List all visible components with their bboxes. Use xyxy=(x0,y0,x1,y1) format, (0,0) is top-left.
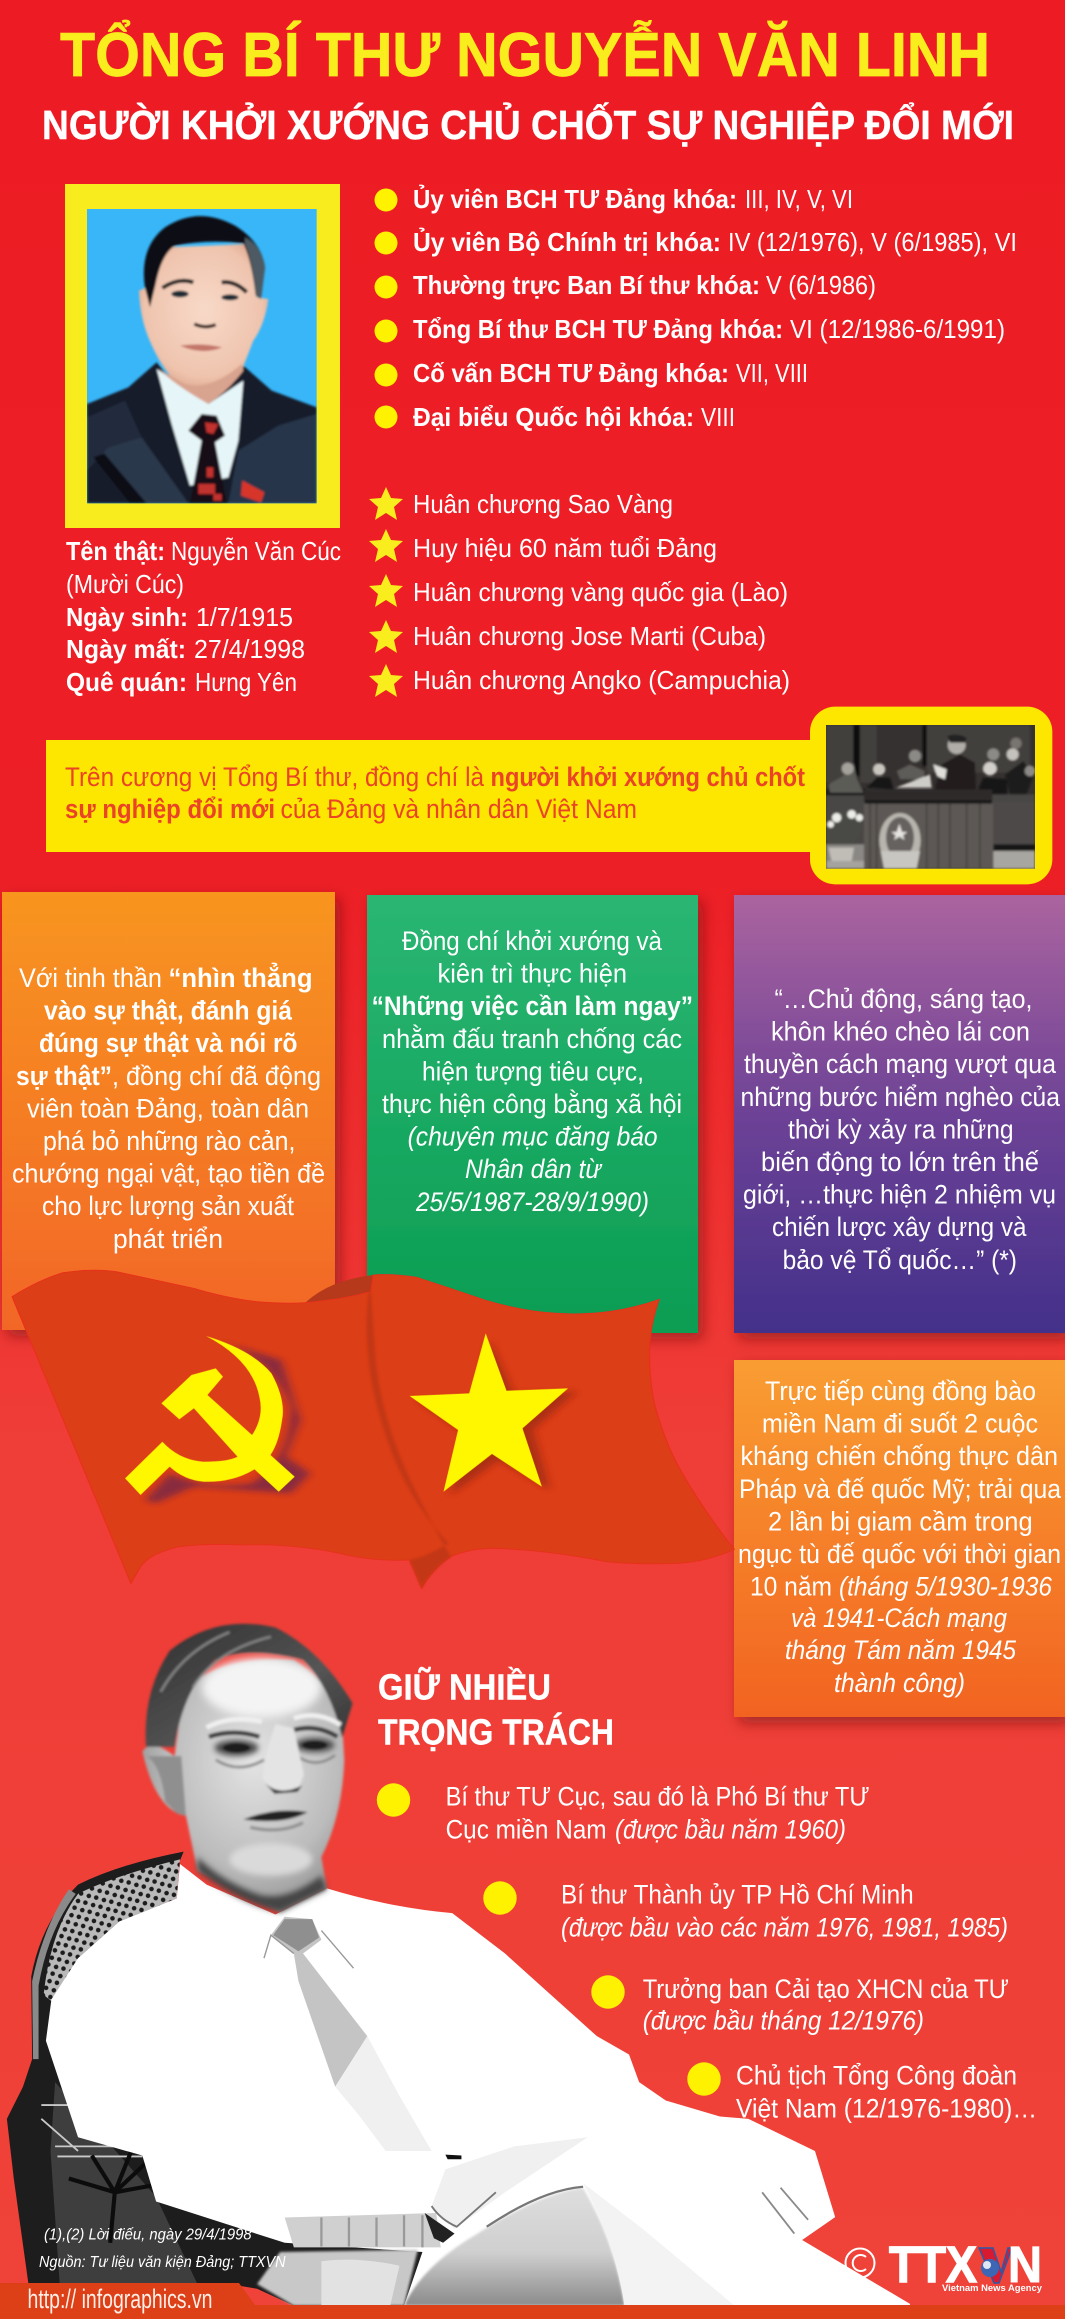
portrait photo in yellow frame xyxy=(65,184,340,528)
list of positions: Ủy viên BCH TƯ Đảng khóa: xyxy=(413,183,737,214)
panel: green campaign: Nhân dân từ xyxy=(465,1154,603,1184)
panel: orange truth: , đồng chí đã động xyxy=(112,1061,321,1091)
footnotes xyxy=(39,2227,286,2271)
panel: orange truth: phá bỏ những rào cản, xyxy=(43,1126,296,1156)
list item: Thành ủy TP Hồ Chí Minh: (được bầu vào các năm 1976, 1981, 1985) xyxy=(561,1913,1008,1943)
list of positions: III, IV, V, VI xyxy=(745,184,853,214)
TTXVN logo: TTX xyxy=(889,2236,977,2293)
list item: Cải tạo XHCN: (được bầu tháng 12/1976) xyxy=(643,2006,924,2036)
panel: orange truth: vào sự thật, đánh giá xyxy=(44,996,293,1026)
list of positions: IV (12/1976), V (6/1985), VI xyxy=(728,227,1017,257)
panel: green campaign: “Những việc cần làm ngay” xyxy=(372,991,693,1021)
panel: orange resistance: và 1941-Cách mạng xyxy=(791,1603,1007,1633)
panel: orange resistance: 10 năm xyxy=(750,1572,832,1602)
list of positions: Cố vấn BCH TƯ Đảng khóa: xyxy=(413,358,729,388)
panel: purple quote: “…Chủ động, sáng tạo, xyxy=(774,984,1032,1014)
personal details: Ngày sinh: xyxy=(66,602,188,632)
panel: purple quote: khôn khéo chèo lái con xyxy=(771,1017,1030,1047)
callout banner: sự nghiệp đổi mới xyxy=(65,794,275,824)
panel: orange truth: cho lực lượng sản xuất xyxy=(42,1191,294,1221)
panel: orange resistance: tháng Tám năm 1945 xyxy=(785,1635,1017,1665)
panel: orange truth: đúng sự thật và nói rõ xyxy=(39,1028,298,1058)
list item: Cục miền Nam: Cục miền Nam xyxy=(446,1814,607,1844)
list item: Thành ủy TP Hồ Chí Minh xyxy=(483,1880,1008,1943)
photo: Nguyễn Văn Linh seated xyxy=(7,1624,910,2306)
list of positions: VI (12/1986-6/1991) xyxy=(790,314,1005,344)
heading: positions held xyxy=(378,1666,614,1753)
panel: purple quote: thời kỳ xảy ra những xyxy=(788,1114,1014,1144)
footnotes: Nguồn: Tư liệu văn kiện Đảng; TTXVN xyxy=(39,2254,286,2271)
footer strip xyxy=(0,2283,1065,2319)
personal details: 27/4/1998 xyxy=(194,634,305,664)
panel: orange resistance: thành công) xyxy=(834,1668,965,1698)
callout banner: Trên cương vị Tổng Bí thư, đồng chí là xyxy=(65,762,485,792)
list item: Cải tạo XHCN xyxy=(591,1974,1009,2036)
panel: orange truth: viên toàn Đảng, toàn dân xyxy=(27,1093,309,1123)
list item: Tổng Công đoàn: Việt Nam (12/1976-1980)… xyxy=(736,2094,1037,2124)
panel: orange resistance: 2 lần bị giam cầm trong xyxy=(768,1506,1033,1536)
panel: orange truth: sự thật” xyxy=(16,1061,112,1091)
personal details: (Mười Cúc) xyxy=(66,569,184,599)
panel: orange resistance: miền Nam đi suốt 2 cuộc xyxy=(762,1409,1038,1439)
list of awards with stars: Huân chương Jose Marti (Cuba) xyxy=(413,621,766,651)
list of awards with stars: Huân chương vàng quốc gia (Lào) xyxy=(413,577,788,607)
list of positions: VIII xyxy=(701,402,735,432)
panel: green campaign: (chuyên mục đăng báo xyxy=(408,1122,658,1152)
personal details: Hưng Yên xyxy=(195,667,297,697)
TTXVN logo: N xyxy=(1008,2236,1042,2293)
personal details: Quê quán: xyxy=(66,667,187,697)
personal details: 1/7/1915 xyxy=(196,602,293,632)
footnotes: (1),(2) Lời điếu, ngày 29/4/1998 xyxy=(44,2227,252,2244)
list of positions: Thường trực Ban Bí thư khóa: xyxy=(413,270,760,300)
list of positions: VII, VIII xyxy=(736,358,808,388)
panel: green campaign: nhằm đấu tranh chống các xyxy=(382,1023,682,1054)
panel: purple quote: chiến lược xây dựng và xyxy=(772,1212,1027,1242)
TTXVN logo: Vietnam News Agency xyxy=(942,2283,1043,2294)
panel: green campaign: kiên trì thực hiện xyxy=(438,959,627,989)
panel: green campaign xyxy=(367,895,698,1333)
callout banner xyxy=(46,740,821,852)
list of positions xyxy=(374,183,1017,432)
list of positions: Đại biểu Quốc hội khóa: xyxy=(413,402,694,432)
title: TỔNG BÍ THƯ NGUYỄN VĂN LINH xyxy=(60,20,990,90)
panel: orange truth: phát triển xyxy=(113,1224,223,1254)
list item: Cục miền Nam: (được bầu năm 1960) xyxy=(615,1814,846,1844)
heading: positions held: TRỌNG TRÁCH xyxy=(378,1712,614,1753)
panel: orange truth xyxy=(2,892,335,1330)
panel: green campaign: hiện tượng tiêu cực, xyxy=(422,1056,644,1086)
website url: http:// infographics.vn xyxy=(28,2284,212,2314)
list of positions: Ủy viên Bộ Chính trị khóa: xyxy=(413,226,721,257)
panel: orange truth: Với tinh thần xyxy=(19,963,162,993)
panel: green campaign: Đồng chí khởi xướng và xyxy=(402,926,663,956)
list of awards with stars: Huân chương Sao Vàng xyxy=(413,489,673,519)
list item: Tổng Công đoàn: Chủ tịch Tổng Công đoàn xyxy=(736,2061,1017,2091)
panel: orange truth: chướng ngại vật, tạo tiền đề xyxy=(12,1159,325,1189)
panel: orange resistance: Trực tiếp cùng đồng bào xyxy=(765,1376,1036,1406)
list of awards with stars xyxy=(369,487,790,697)
panel: purple quote xyxy=(734,895,1065,1333)
personal details: Ngày mất: xyxy=(66,634,186,664)
list of awards with stars: Huy hiệu 60 năm tuổi Đảng xyxy=(413,533,717,563)
list item: Cục miền Nam: Bí thư TƯ Cục, sau đó là Phó Bí thư TƯ xyxy=(446,1782,870,1812)
callout banner: người khởi xướng chủ chốt xyxy=(490,762,805,792)
personal details xyxy=(66,536,341,697)
callout banner: của Đảng và nhân dân Việt Nam xyxy=(280,794,637,824)
panel: green campaign: thực hiện công bằng xã hội xyxy=(382,1088,682,1119)
list item: Cải tạo XHCN: Trưởng ban Cải tạo XHCN của TƯ xyxy=(643,1974,1009,2004)
flag: party and national flags xyxy=(12,1270,734,1588)
panel: purple quote: biến động to lớn trên thế xyxy=(761,1147,1039,1177)
personal details: Tên thật: xyxy=(66,536,165,566)
list item: Tổng Công đoàn xyxy=(687,2061,1037,2124)
panel: green campaign: 25/5/1987-28/9/1990) xyxy=(415,1187,649,1217)
personal details: Nguyễn Văn Cúc xyxy=(171,536,341,566)
list of awards with stars: Huân chương Angko (Campuchia) xyxy=(413,665,790,695)
panel: purple quote: bảo vệ Tổ quốc…” (*) xyxy=(783,1245,1017,1275)
TTXVN logo xyxy=(846,2236,1043,2294)
heading: positions held: GIỮ NHIỀU xyxy=(378,1666,551,1708)
panel: orange resistance xyxy=(734,1360,1065,1717)
list of positions: Tổng Bí thư BCH TƯ Đảng khóa: xyxy=(413,314,783,344)
list item: Cục miền Nam xyxy=(377,1782,870,1844)
panel: orange truth: “nhìn thẳng xyxy=(168,961,312,993)
list item: Thành ủy TP Hồ Chí Minh: Bí thư Thành ủy TP Hồ Chí Minh xyxy=(561,1880,914,1910)
congress podium photo xyxy=(810,707,1052,884)
list of positions: V (6/1986) xyxy=(766,270,876,300)
